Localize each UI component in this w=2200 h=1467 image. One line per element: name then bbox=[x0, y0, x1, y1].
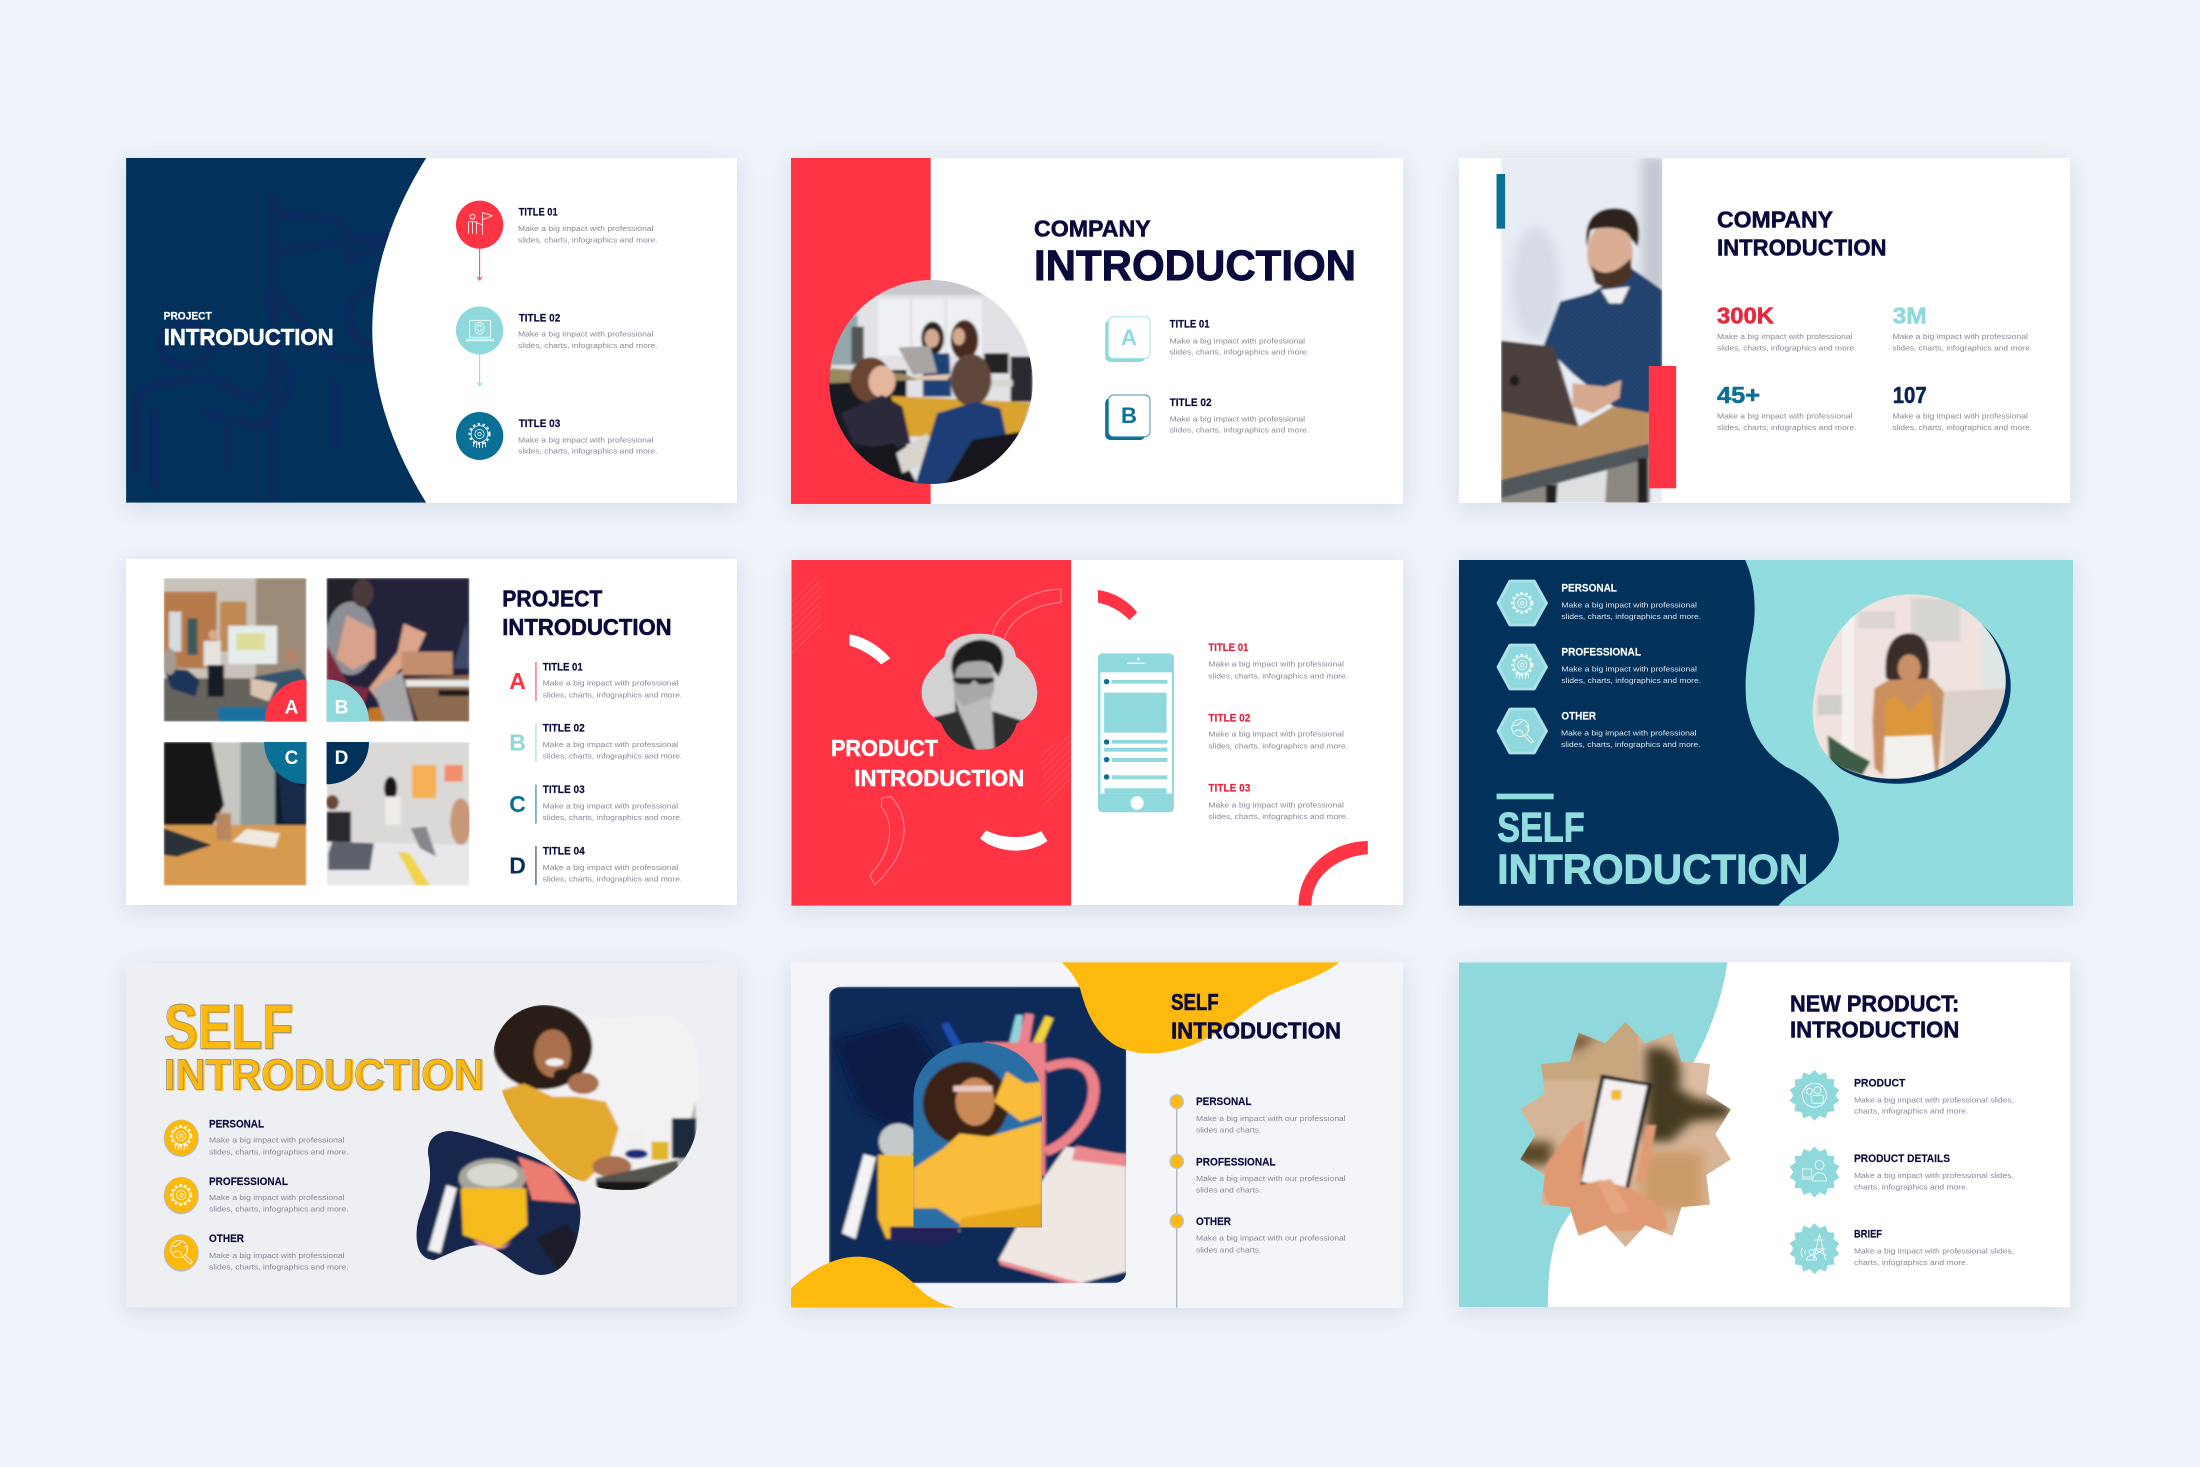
photo badge letters: D bbox=[335, 748, 348, 769]
heading: new product introduction: NEW PRODUCT: bbox=[1790, 991, 1959, 1017]
item: title 03 bbox=[543, 784, 682, 822]
photo badge letters: A bbox=[285, 698, 299, 718]
item: title 04: Make a big impact with professional bbox=[543, 863, 679, 872]
list letters: B bbox=[509, 730, 526, 756]
item: title 01 bbox=[1170, 319, 1309, 357]
panel: project introduction bbox=[126, 158, 737, 503]
item: other: OTHER bbox=[1561, 711, 1596, 723]
item: other: Make a big impact with professional bbox=[1561, 728, 1697, 737]
item: professional: slides, charts, infographics and more. bbox=[1561, 676, 1701, 685]
icon: people cycle bbox=[1802, 1083, 1826, 1107]
item: title 03: slides, charts, infographics and more. bbox=[543, 813, 682, 822]
item: title 03: slides, charts, infographics and more. bbox=[1208, 812, 1348, 821]
heading: product introduction: INTRODUCTION bbox=[854, 765, 1024, 791]
stat: 3M: 3M bbox=[1893, 302, 1927, 328]
stat: 3M: Make a big impact with professional bbox=[1892, 332, 2028, 341]
item: title 01: slides, charts, infographics and more. bbox=[1208, 671, 1348, 680]
item: title 02 bbox=[543, 723, 682, 761]
item: brief: charts, infographics and more. bbox=[1854, 1258, 1968, 1267]
heading: project introduction bbox=[502, 586, 672, 640]
stat: 107: slides, charts, infographics and more. bbox=[1892, 423, 2032, 432]
item: title 02: TITLE 02 bbox=[1208, 712, 1250, 724]
icon: laptop fingerprint bbox=[466, 320, 494, 341]
heading: self introduction bbox=[1171, 989, 1341, 1043]
heading: company: COMPANY bbox=[1034, 216, 1151, 242]
item: title 04: slides, charts, infographics and more. bbox=[543, 874, 682, 884]
item: personal bbox=[1561, 583, 1701, 621]
stat: 300K bbox=[1717, 302, 1857, 352]
item: other: slides, charts, infographics and more. bbox=[1561, 740, 1701, 749]
stat: 45+ bbox=[1717, 382, 1857, 432]
item: professional: Make a big impact with our professional bbox=[1196, 1174, 1346, 1183]
item: title 03: Make a big impact with professional bbox=[543, 802, 679, 810]
item: title 04 bbox=[543, 846, 682, 884]
item: professional: Make a big impact with professional bbox=[1561, 664, 1697, 673]
item: personal: slides, charts, infographics and more. bbox=[209, 1147, 349, 1156]
item: brief: Make a big impact with professional slides, bbox=[1854, 1247, 2014, 1256]
heading: new product introduction: INTRODUCTION bbox=[1790, 1016, 1959, 1042]
item: title 01: Make a big impact with professional bbox=[1170, 336, 1305, 345]
heading: introduction: INTRODUCTION bbox=[164, 324, 334, 350]
item: personal: slides and charts. bbox=[1196, 1125, 1261, 1134]
heading: company introduction bbox=[1717, 206, 1886, 260]
item: title 03: TITLE 03 bbox=[519, 418, 560, 430]
item: personal bbox=[1196, 1096, 1346, 1134]
item: professional: PROFESSIONAL bbox=[1196, 1156, 1276, 1168]
item: title 01: TITLE 01 bbox=[543, 661, 583, 673]
icon: gear person bbox=[171, 1126, 191, 1150]
stat: 300K: slides, charts, infographics and more. bbox=[1717, 343, 1857, 352]
icon: gear bbox=[171, 1185, 191, 1205]
stat: 3M: slides, charts, infographics and more. bbox=[1892, 343, 2032, 352]
item: title 01: slides, charts, infographics and more. bbox=[1170, 348, 1309, 357]
item: personal: Make a big impact with professional bbox=[209, 1136, 345, 1145]
panel: project introduction photo grid bbox=[126, 559, 737, 905]
item: title 02 bbox=[518, 312, 658, 350]
item: personal: Make a big impact with our professional bbox=[1196, 1114, 1346, 1123]
badge B: B bbox=[1121, 403, 1137, 428]
item: brief: BRIEF bbox=[1854, 1229, 1882, 1241]
item: other: Make a big impact with our professional bbox=[1196, 1234, 1346, 1243]
heading: self introduction outlined bbox=[164, 992, 485, 1100]
heading: introduction: INTRODUCTION bbox=[1034, 242, 1356, 290]
heading: project introduction: PROJECT bbox=[502, 586, 603, 612]
item: title 02 bbox=[1208, 712, 1348, 750]
item: product: Make a big impact with professional slides, bbox=[1854, 1095, 2014, 1104]
heading: self introduction outlined: INTRODUCTION bbox=[165, 1051, 485, 1100]
heading: self introduction: INTRODUCTION bbox=[1171, 1017, 1341, 1043]
icon: gear person bbox=[1512, 655, 1532, 679]
heading: product introduction: PRODUCT bbox=[831, 735, 939, 761]
panel: self introduction yellow bbox=[126, 963, 737, 1307]
item: product details: Make a big impact with professional slides, bbox=[1854, 1171, 2014, 1180]
item: personal bbox=[209, 1118, 349, 1156]
item: product bbox=[1854, 1077, 2014, 1116]
item: title 04: TITLE 04 bbox=[543, 846, 586, 858]
badge A: A bbox=[1121, 325, 1137, 350]
item: title 01: TITLE 01 bbox=[1208, 642, 1248, 654]
item: personal: PERSONAL bbox=[1196, 1096, 1252, 1108]
icon: search globe bbox=[1512, 720, 1533, 743]
stat: 3M bbox=[1892, 302, 2032, 352]
panel: self introduction teal bbox=[1459, 560, 2073, 906]
item: other bbox=[209, 1233, 349, 1271]
heading: self introduction outlined: SELF bbox=[165, 993, 294, 1063]
item: title 01 bbox=[543, 661, 682, 699]
list letters: A bbox=[509, 668, 526, 694]
panel: product introduction bbox=[791, 560, 1403, 906]
item: title 02: TITLE 02 bbox=[1170, 397, 1212, 409]
item: other: Make a big impact with professional bbox=[209, 1251, 345, 1260]
item: other: OTHER bbox=[1196, 1216, 1231, 1228]
panel: self introduction timeline bbox=[791, 962, 1403, 1308]
item: title 03: slides, charts, infographics and more. bbox=[518, 447, 658, 456]
item: other bbox=[1561, 711, 1701, 749]
icon: tower bbox=[1801, 1234, 1826, 1260]
item: brief bbox=[1854, 1229, 2014, 1267]
panel: company statistics bbox=[1459, 157, 2070, 503]
stat: 300K: Make a big impact with professional bbox=[1717, 332, 1853, 341]
item: product: charts, infographics and more. bbox=[1854, 1107, 1968, 1116]
stat: 107: Make a big impact with professional bbox=[1892, 412, 2028, 421]
item: professional bbox=[1196, 1156, 1346, 1194]
item: title 02: Make a big impact with professional bbox=[518, 330, 654, 339]
item: title 02 bbox=[1170, 397, 1309, 435]
item: title 03 bbox=[1208, 782, 1348, 821]
item: personal: PERSONAL bbox=[1561, 583, 1617, 595]
icon: person with flag bbox=[468, 213, 492, 235]
stat: 107 bbox=[1892, 382, 2032, 432]
item: title 03 bbox=[518, 418, 658, 456]
item: other: slides, charts, infographics and more. bbox=[209, 1262, 349, 1271]
photo badge letters bbox=[285, 698, 348, 769]
item: title 03: TITLE 03 bbox=[1208, 782, 1250, 794]
item: title 01: Make a big impact with professional bbox=[1208, 660, 1344, 669]
item: title 01: TITLE 01 bbox=[519, 207, 558, 219]
item: professional: slides and charts. bbox=[1196, 1185, 1261, 1194]
photo badge letters: B bbox=[335, 698, 348, 718]
item: title 01: slides, charts, infographics and more. bbox=[543, 690, 682, 699]
item: title 02: slides, charts, infographics and more. bbox=[518, 341, 658, 350]
heading: self introduction bbox=[1497, 804, 1808, 892]
item: title 02: TITLE 02 bbox=[519, 312, 560, 324]
stat: 45+: slides, charts, infographics and more. bbox=[1717, 423, 1857, 432]
item: title 03: Make a big impact with professional bbox=[1208, 800, 1344, 809]
item: product details: charts, infographics and more. bbox=[1854, 1182, 1968, 1192]
item: title 02: slides, charts, infographics and more. bbox=[543, 752, 682, 761]
stat: 300K: 300K bbox=[1717, 302, 1774, 328]
item: title 03: Make a big impact with professional bbox=[518, 435, 654, 444]
list letters: C bbox=[509, 791, 526, 817]
icon: person with screen bbox=[1802, 1160, 1826, 1181]
item: title 02: Make a big impact with professional bbox=[1208, 730, 1344, 739]
item: title 01: TITLE 01 bbox=[1170, 319, 1210, 331]
badge B bbox=[1105, 395, 1150, 440]
item: professional bbox=[209, 1176, 349, 1214]
heading: self introduction: SELF bbox=[1171, 989, 1219, 1015]
stat: 107: 107 bbox=[1893, 382, 1927, 408]
panel: new product introduction bbox=[1459, 962, 2070, 1307]
heading: self introduction outlined: SELF bbox=[164, 992, 293, 1062]
heading: self introduction: INTRODUCTION bbox=[1497, 845, 1808, 892]
list letters bbox=[509, 668, 526, 878]
heading: project introduction: INTRODUCTION bbox=[502, 614, 672, 640]
item: product details bbox=[1854, 1153, 2014, 1192]
item: title 02: slides, charts, infographics and more. bbox=[1208, 742, 1348, 750]
badge A bbox=[1105, 317, 1150, 362]
item: title 01: slides, charts, infographics and more. bbox=[518, 235, 658, 244]
item: professional: slides, charts, infographics and more. bbox=[209, 1205, 349, 1214]
item: title 02: Make a big impact with professional bbox=[1170, 414, 1305, 423]
item: product details: PRODUCT DETAILS bbox=[1854, 1153, 1950, 1165]
list letters: D bbox=[509, 852, 526, 878]
item: title 01: Make a big impact with professional bbox=[543, 679, 679, 688]
item: title 03: TITLE 03 bbox=[543, 784, 585, 796]
icon: gear bbox=[1512, 593, 1532, 613]
heading: self introduction outlined: INTRODUCTION bbox=[164, 1050, 484, 1100]
item: other: OTHER bbox=[209, 1233, 244, 1245]
item: professional: PROFESSIONAL bbox=[209, 1176, 288, 1188]
panel: company introduction bbox=[791, 158, 1403, 504]
item: other: slides and charts. bbox=[1196, 1245, 1261, 1254]
heading: company introduction: INTRODUCTION bbox=[1717, 234, 1886, 260]
item: product: PRODUCT bbox=[1854, 1077, 1906, 1089]
heading: new product introduction bbox=[1790, 991, 1959, 1042]
item: personal: PERSONAL bbox=[209, 1118, 264, 1130]
item: title 02: TITLE 02 bbox=[543, 723, 585, 735]
stat: 45+: Make a big impact with professional bbox=[1717, 412, 1853, 421]
icon: gear person bbox=[470, 424, 490, 448]
item: professional bbox=[1561, 647, 1701, 685]
stat: 45+: 45+ bbox=[1717, 382, 1760, 408]
heading: product introduction bbox=[831, 735, 1024, 791]
heading: company introduction: COMPANY bbox=[1717, 206, 1833, 232]
item: title 01: Make a big impact with professional bbox=[518, 224, 654, 233]
item: personal: Make a big impact with professional bbox=[1561, 600, 1697, 609]
heading: self introduction: SELF bbox=[1497, 804, 1585, 851]
item: title 01 bbox=[1208, 642, 1348, 680]
item: title 02: Make a big impact with professional bbox=[543, 740, 679, 749]
item: title 02: slides, charts, infographics and more. bbox=[1170, 426, 1309, 435]
item: personal: slides, charts, infographics and more. bbox=[1561, 612, 1701, 621]
photo badge letters: C bbox=[285, 748, 299, 769]
heading: project: PROJECT bbox=[164, 310, 212, 322]
item: other bbox=[1196, 1216, 1346, 1254]
item: title 01 bbox=[518, 207, 658, 244]
icon: search globe bbox=[171, 1240, 192, 1264]
slide shadows bbox=[126, 163, 2073, 1312]
item: professional: PROFESSIONAL bbox=[1561, 647, 1641, 659]
item: professional: Make a big impact with professional bbox=[209, 1193, 345, 1202]
